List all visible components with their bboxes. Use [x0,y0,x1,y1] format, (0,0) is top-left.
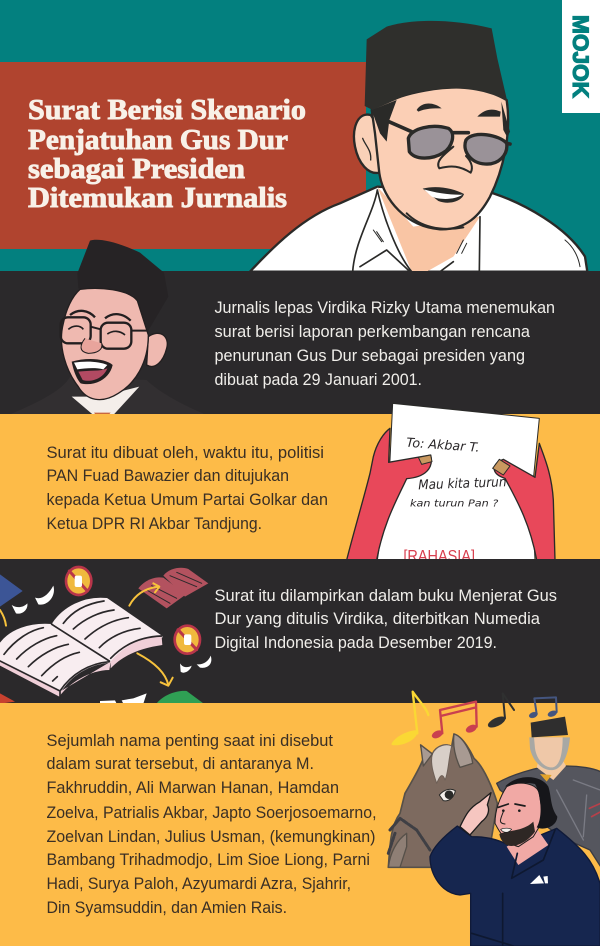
illustration: hands holding letter [347,403,555,566]
illustration: horse, armoured figure and politician with music notes [388,692,600,946]
illustration: laughing politician portrait [60,240,168,414]
text block: intro paragraph: Jurnalis lepas Virdika Rizky Utama menemukan [214,298,555,317]
text block: names paragraph: Zoelva, Patrialis Akbar, Japto Soerjosoemarno, [46,803,376,822]
panel: yellow letter band [0,414,600,559]
icon: white eye shapes [12,586,211,704]
text block: names paragraph: Bambang Trihadmodjo, Lim Sioe Liong, Parni [46,850,370,869]
text block: names paragraph: Zoelvan Lindan, Julius Usman, (kemungkinan) [46,827,376,846]
text block: letter author paragraph: Ketua DPR RI Akbar Tandjung. [46,514,262,533]
illustration: man pointing in navy suit [430,777,600,946]
text block: names paragraph: Fakhruddin, Ali Marwan Hanan, Hamdan [46,778,339,797]
icon: red book bottom left [0,693,15,704]
panel: dark book band [0,559,600,703]
text block: book paragraph: Dur yang ditulis Virdika, diterbitkan Numedia [214,609,541,628]
text block: names paragraph [46,731,376,917]
text block: letter author paragraph: PAN Fuad Bawazier dan ditujukan [46,466,289,485]
arrow: yellow arrow from blue book [0,610,6,626]
text block: intro paragraph: dibuat pada 29 Januari 2001. [214,370,422,389]
panel: red title block [0,62,366,249]
title: Surat Berisi Skenario [28,95,306,126]
icon: Mojok logo tab [562,0,600,113]
panel: yellow names band [0,703,600,946]
text block: letter author paragraph [46,443,328,533]
icon: blue book [0,574,23,607]
illustration: open books scene [0,567,211,704]
icon: yellow music note [392,692,428,745]
arrow: yellow arrow to rose book [129,583,159,606]
text block: letter author paragraph: Surat itu dibuat oleh, waktu itu, politisi [46,443,324,462]
icon: black music note [487,693,514,730]
text block: book paragraph: Digital Indonesia pada Desember 2019. [214,633,497,652]
title [28,95,306,214]
illustration: hands holding letter: kan turun Pan ? [410,499,499,510]
text block: names paragraph: Din Syamsuddin, dan Amien Rais. [46,898,287,917]
title: Ditemukan Jurnalis [28,183,287,214]
title: Penjatuhan Gus Dur [28,125,288,156]
title: sebagai Presiden [28,154,245,185]
text block: book paragraph: Surat itu dilampirkan dalam buku Menjerat Gus [214,586,557,605]
illustration: hands holding letter: Mau kita turun [418,475,507,493]
illustration: hands holding letter: To: Akbar T. [406,435,480,455]
panel: dark intro band [0,271,600,414]
text block: names paragraph: Sejumlah nama penting saat ini disebut [46,731,333,750]
text block: intro paragraph [214,298,555,389]
icon: green book [157,691,203,703]
icon: rose book [138,568,208,608]
illustration: horse [388,734,497,867]
text block: names paragraph: Hadi, Surya Paloh, Azyumardi Azra, Sjahrir, [46,874,351,893]
arrow: yellow arrow to green book [137,653,173,686]
text block: book paragraph [214,586,557,652]
text block: names paragraph: dalam surat tersebut, di antaranya M. [46,754,314,773]
text block: intro paragraph: penurunan Gus Dur sebagai presiden yang [214,346,525,365]
icon: Mojok logo tab: MOJOK [568,15,593,98]
icon: prohibition sign upper [66,567,91,595]
panel: teal header background [0,0,600,271]
icon: prohibition sign lower [175,626,200,654]
icon: blue music notes [528,697,558,719]
icon: large open book [0,599,162,698]
illustration: hands holding letter: [RAHASIA] [403,547,475,566]
illustration: armoured figure [497,717,600,867]
icon: red music notes [431,702,478,740]
text block: intro paragraph: surat berisi laporan perkembangan rencana [214,322,531,341]
illustration: Gus Dur portrait [250,21,587,272]
text block: letter author paragraph: kepada Ketua Umum Partai Golkar dan [46,490,328,509]
